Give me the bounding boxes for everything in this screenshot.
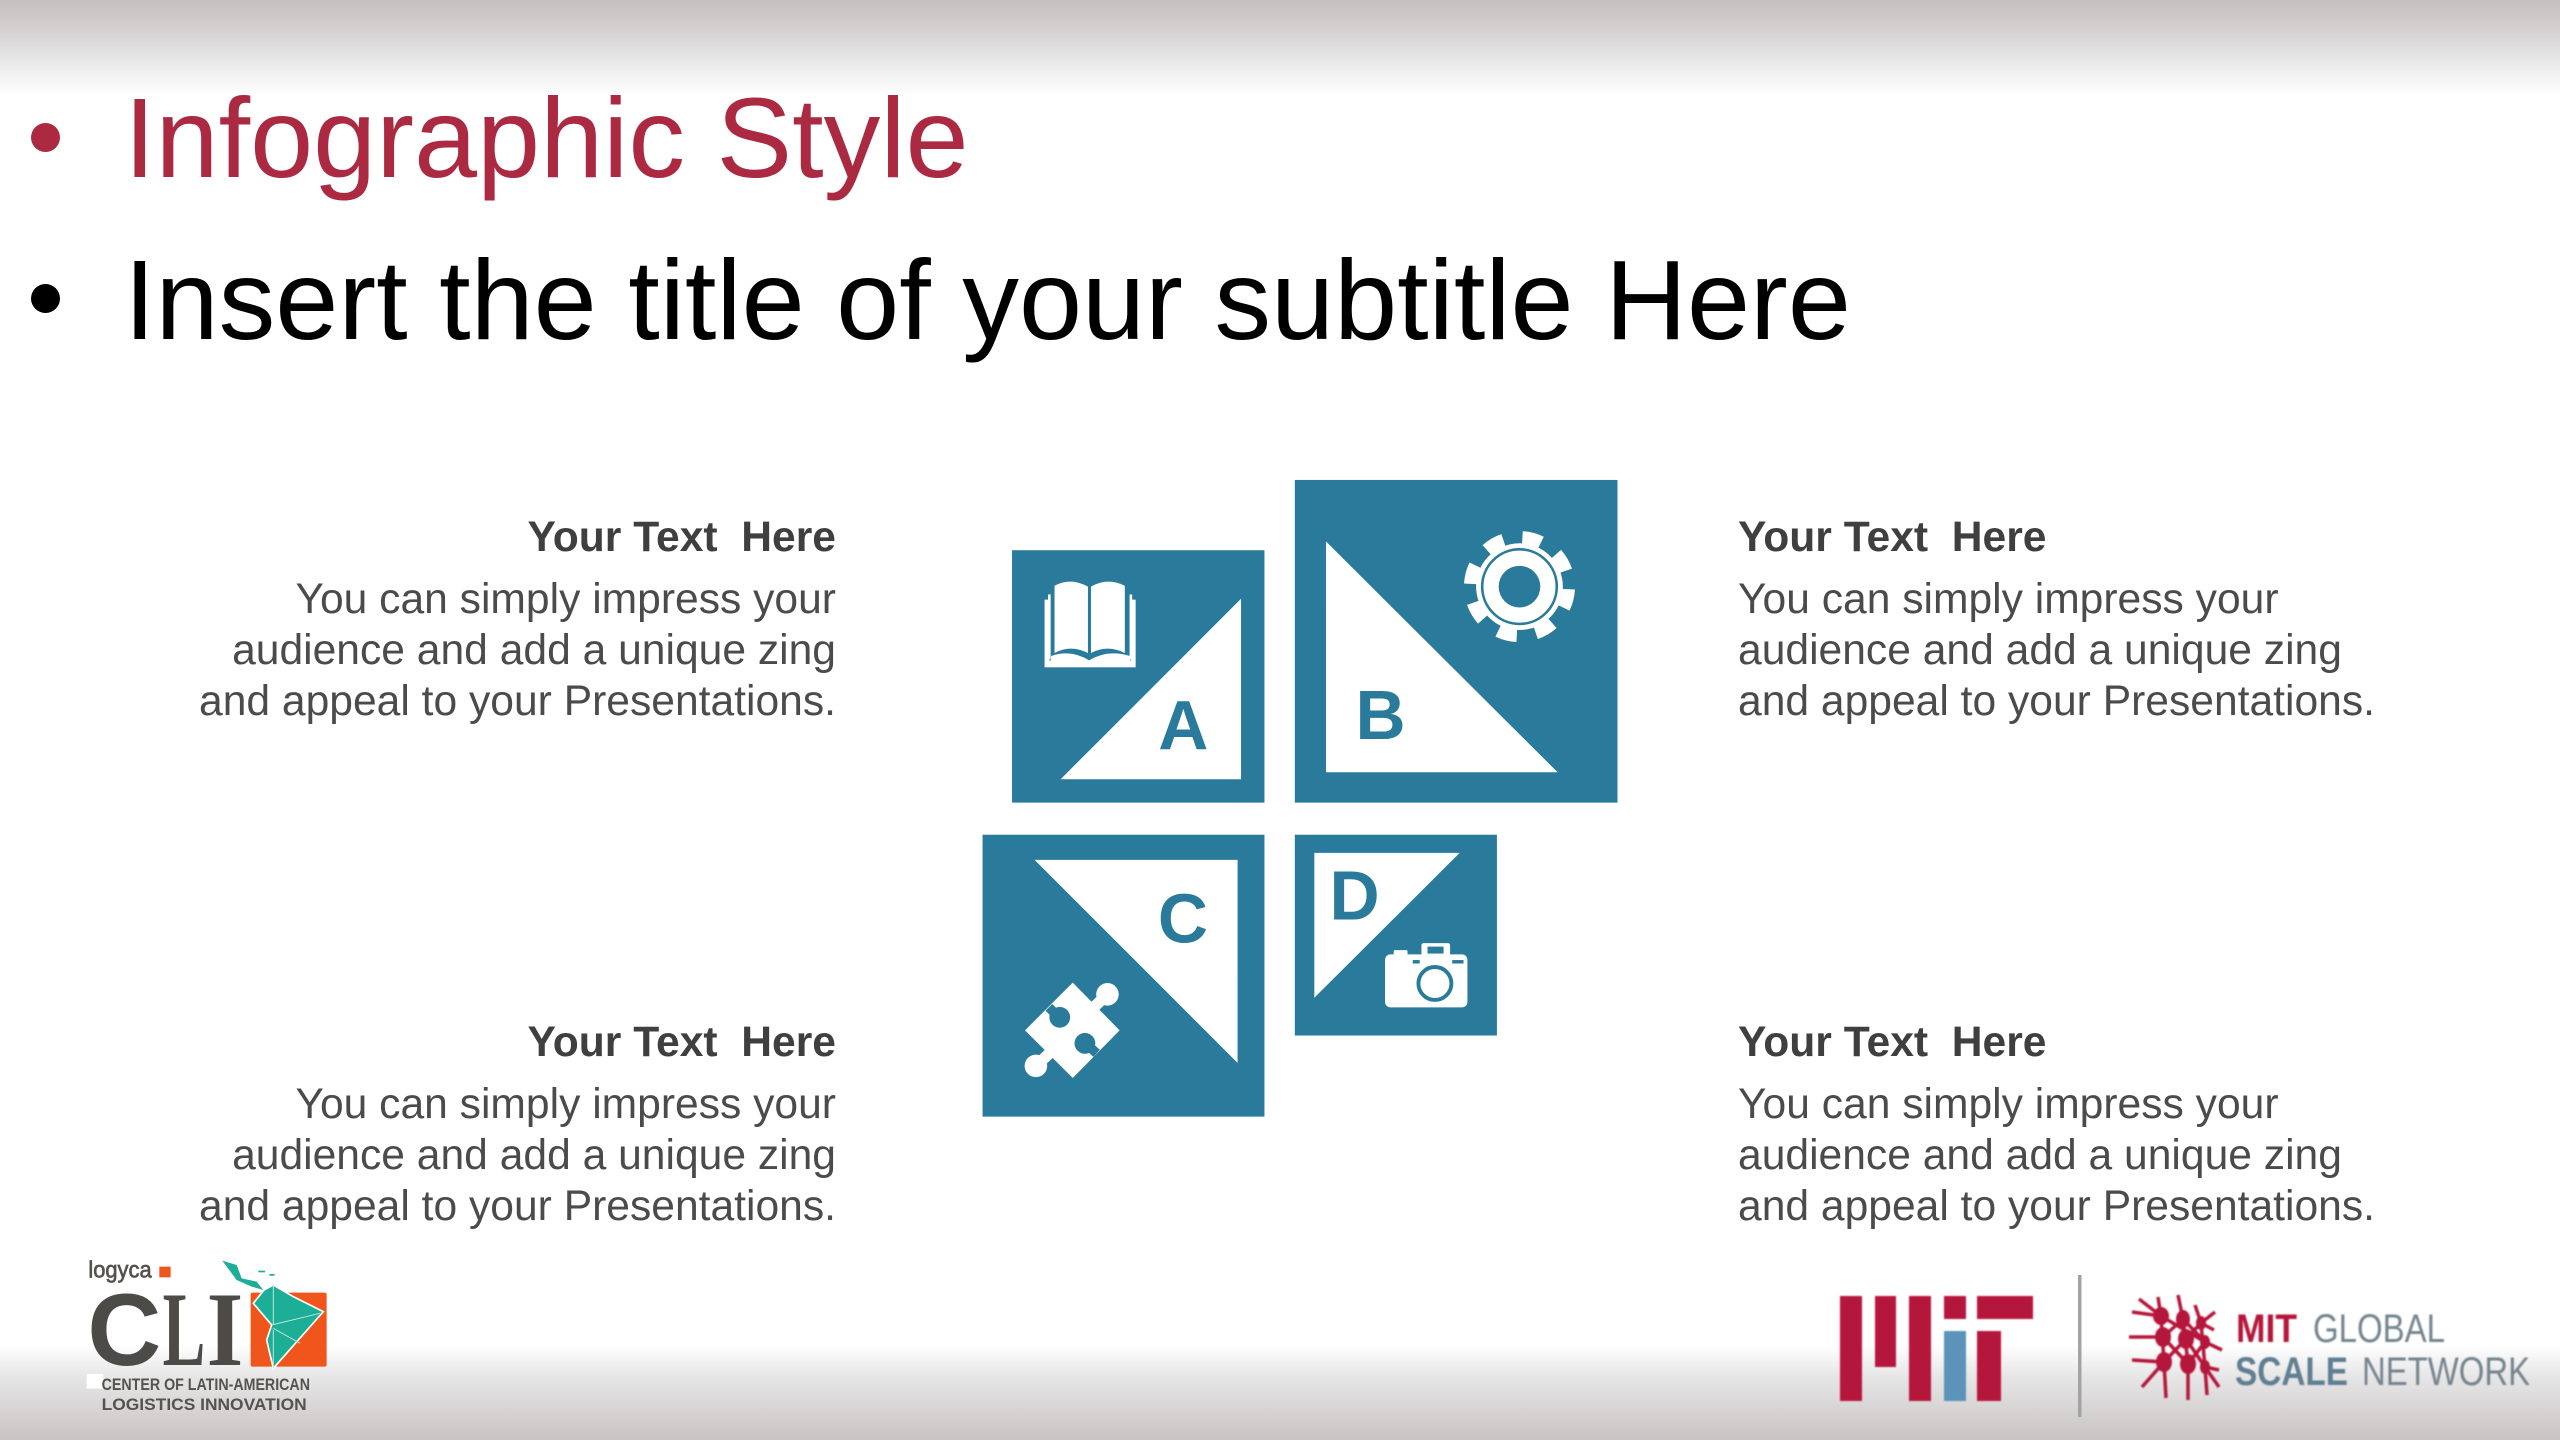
tile A xyxy=(1012,550,1264,803)
tile D: D xyxy=(1330,857,1380,935)
text block: bottom right: audience and add a unique zing xyxy=(1738,1130,2342,1178)
text block: top left xyxy=(199,513,836,724)
text block: bottom left xyxy=(199,1018,836,1230)
text block: bottom left: Your Text Here xyxy=(528,1018,836,1066)
logo: CLI: CENTER OF LATIN-AMERICAN xyxy=(102,1375,310,1394)
logo: MIT Global Scale Network xyxy=(2129,1295,2530,1400)
text block: top right xyxy=(1738,513,2375,724)
network name text: GLOBAL xyxy=(2313,1307,2445,1351)
text block: top right: audience and add a unique zing xyxy=(1738,626,2342,674)
logo: MIT xyxy=(1840,1296,2033,1401)
logo: CLI: C xyxy=(87,1273,161,1387)
tile grid xyxy=(983,480,1617,1117)
tile B: B xyxy=(1356,676,1406,754)
text block: top right: Your Text Here xyxy=(1738,513,2046,561)
icon: gear xyxy=(1468,536,1571,638)
network name text xyxy=(2235,1307,2530,1394)
tile B xyxy=(1295,480,1617,803)
text block: bottom left: audience and add a unique zing xyxy=(232,1130,836,1178)
tile C: C xyxy=(1158,879,1208,957)
network name text: MIT xyxy=(2236,1307,2297,1351)
tile D xyxy=(1295,835,1497,1036)
tile C xyxy=(983,835,1264,1117)
text block: top left: You can simply impress your xyxy=(295,574,836,622)
text block: bottom left: You can simply impress your xyxy=(295,1080,836,1128)
text block: bottom right: and appeal to your Presentations. xyxy=(1738,1182,2375,1230)
text block: top right: and appeal to your Presentations. xyxy=(1738,676,2375,724)
text block: bottom left: and appeal to your Presentations. xyxy=(199,1182,836,1230)
icon: book xyxy=(1045,582,1136,667)
icon: puzzle piece xyxy=(1025,983,1120,1078)
title: Infographic Style: Infographic Style xyxy=(124,75,969,202)
text block: bottom right: You can simply impress your xyxy=(1738,1080,2279,1128)
logo: CLI xyxy=(87,1256,327,1414)
text block: top left: Your Text Here xyxy=(528,513,836,561)
network name text: SCALE xyxy=(2235,1350,2348,1394)
text block: top right: You can simply impress your xyxy=(1738,574,2279,622)
text block: bottom right: Your Text Here xyxy=(1738,1018,2046,1066)
icon: network xyxy=(2129,1295,2222,1400)
logo: CLI: LOGISTICS INNOVATION xyxy=(102,1395,307,1414)
text block: bottom right xyxy=(1738,1018,2375,1230)
logo: CLI: I xyxy=(207,1271,243,1388)
icon: camera xyxy=(1385,943,1467,1007)
bottom gradient band xyxy=(0,1345,2560,1440)
logo: CLI: logyca xyxy=(88,1256,152,1282)
top gradient band xyxy=(0,0,2560,96)
tile A: A xyxy=(1158,687,1208,765)
text block: top left: and appeal to your Presentations. xyxy=(199,676,836,724)
text block: top left: audience and add a unique zing xyxy=(232,626,836,674)
subtitle: Insert the title: Insert the title of your subtitle Here xyxy=(124,237,1851,364)
logo: CLI: L xyxy=(163,1271,205,1388)
